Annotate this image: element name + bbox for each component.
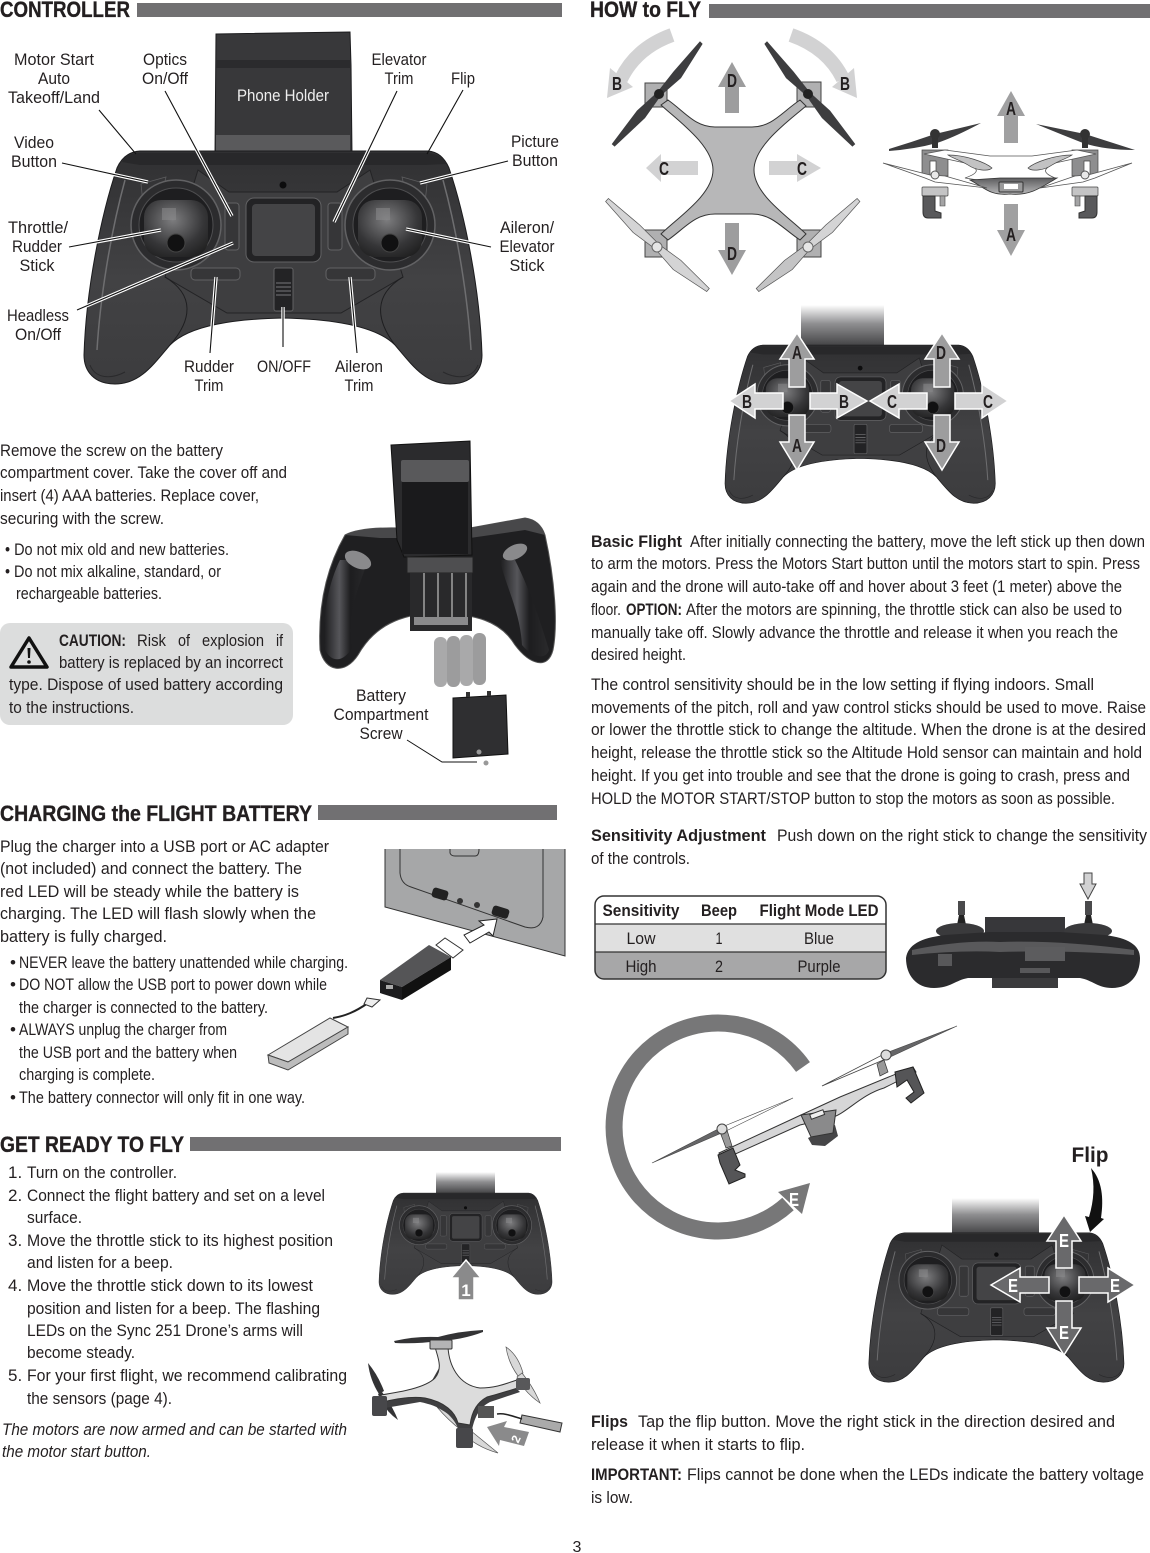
arrow: E right: E	[1110, 1276, 1120, 1296]
text: motors armed note: The motors are now armed and can be started with	[2, 1420, 347, 1439]
arrow: E left	[991, 1268, 1049, 1302]
arrow: A up: A	[1006, 99, 1016, 119]
text: battery instructions: securing with the screw.	[0, 509, 164, 528]
arrow: A down stick	[780, 415, 814, 470]
arrow: D up: D	[727, 71, 737, 91]
label: motor start: Auto	[38, 69, 70, 88]
illustration: controller step 1	[379, 1172, 552, 1300]
list: steps: 1.	[8, 1163, 22, 1182]
list: steps: For your first flight, we recommend calibrating	[27, 1366, 347, 1385]
list: steps: 4.	[8, 1276, 22, 1295]
list: battery warnings: • Do not mix alkaline, standard, or	[5, 562, 221, 581]
label: phone holder: Phone Holder	[237, 86, 329, 105]
heading bar: controller	[137, 3, 562, 17]
arrow: E up	[1047, 1215, 1081, 1268]
label: picture button	[511, 132, 559, 170]
text: charging instructions: Plug the charger into a USB port or AC adapter	[0, 837, 329, 856]
list: charging warnings	[10, 953, 348, 1107]
arrow: B left: B	[612, 74, 622, 94]
arrow: C left: C	[659, 159, 669, 179]
list: battery warnings: rechargeable batteries.	[16, 584, 162, 603]
list: steps: LEDs on the Sync 251 Drone’s arms will	[27, 1321, 303, 1340]
list: charging warnings: DO NOT allow the USB port to power down while	[19, 975, 327, 994]
text: flips: Tap the flip button. Move the right stick in the direction desired and	[638, 1412, 1115, 1431]
panel: how to fly	[590, 0, 1150, 1507]
text: control sensitivity: The control sensitivity should be in the low setting if flying indoors. Small	[591, 675, 1094, 694]
label: aileron trim: Aileron	[335, 357, 383, 376]
arrow: C right: C	[797, 159, 807, 179]
list: steps: 2.	[8, 1186, 22, 1205]
arrow: step 2	[487, 1421, 529, 1446]
illustration: controller with flip arrows	[869, 1144, 1135, 1382]
label: motor start	[8, 50, 100, 107]
text: charging instructions: battery is fully charged.	[0, 927, 167, 946]
label: battery compartment screw	[334, 686, 477, 762]
illustration: phone holder	[215, 32, 352, 167]
text: important: IMPORTANT:	[591, 1465, 682, 1484]
label: aileron trim: Trim	[344, 376, 374, 395]
table: sensitivity: Low	[626, 929, 656, 948]
label: optics: Optics	[143, 50, 187, 69]
callout: caution	[0, 623, 293, 725]
callout: caution: if	[276, 631, 283, 650]
label: battery compartment screw: Compartment	[334, 705, 429, 724]
list: steps: surface.	[27, 1208, 82, 1227]
arrow: E down: E	[1059, 1323, 1069, 1343]
table: sensitivity: 1	[716, 929, 722, 948]
label: video button: Video	[14, 133, 54, 152]
text: motors armed note	[2, 1420, 347, 1461]
arrow: C right stick	[955, 384, 1008, 418]
panel: charging section	[0, 801, 565, 1107]
table: sensitivity: Beep	[701, 901, 737, 920]
arrow: step 1	[451, 1260, 481, 1300]
list: steps	[8, 1163, 347, 1408]
text: battery instructions: Remove the screw on the battery	[0, 441, 223, 460]
label: rudder trim: Trim	[194, 376, 224, 395]
illustration: controller back with batteries	[320, 441, 555, 766]
leader lines	[62, 90, 508, 353]
callout: caution: CAUTION:	[59, 631, 126, 650]
heading: get ready: GET READY TO FLY	[0, 1132, 184, 1157]
text: charging instructions: (not included) and connect the battery. The	[0, 859, 302, 878]
list: charging warnings: •	[10, 975, 16, 994]
arrow: A up stick	[780, 333, 814, 387]
list: steps: position and listen for a beep. The flashing	[27, 1299, 320, 1318]
arrow: D up stick: D	[936, 343, 946, 363]
text: battery instructions: compartment cover. Take the cover off and	[0, 463, 287, 482]
arrow: E right	[1079, 1268, 1135, 1302]
text: sensitivity adjustment	[591, 826, 1147, 868]
list: steps: Move the throttle stick to its highest position	[27, 1231, 333, 1250]
arrow: A down: A	[1006, 225, 1016, 245]
list: charging warnings: charging is complete.	[19, 1065, 155, 1084]
arrow: flip button	[1085, 1168, 1104, 1232]
label: headless: On/Off	[15, 325, 61, 344]
illustration: controller side view	[906, 873, 1140, 988]
list: battery warnings	[5, 540, 229, 603]
arrow: E left: E	[1008, 1276, 1018, 1296]
text: important: is low.	[591, 1488, 633, 1507]
arrow: step 2: 2	[508, 1433, 524, 1445]
label: aileron elevator stick: Aileron/	[500, 218, 554, 237]
illustration: controller with stick arrows	[725, 305, 1008, 503]
label: aileron elevator stick: Stick	[510, 256, 545, 275]
illustration: flip circle arrow	[614, 1023, 810, 1231]
label: video button: Button	[11, 152, 57, 171]
text: battery instructions	[0, 441, 287, 528]
table: sensitivity: Sensitivity	[602, 901, 680, 920]
text: basic flight: floor.	[591, 600, 621, 619]
illustration: drone side view	[883, 91, 1135, 256]
arrow: C right	[769, 154, 821, 182]
label: battery compartment screw: Battery	[356, 686, 406, 705]
arrow: D down stick: D	[936, 436, 946, 456]
label: elevator trim: Elevator	[372, 50, 427, 69]
list: steps: 5.	[8, 1366, 22, 1385]
callout: caution: to the instructions.	[9, 698, 134, 717]
arrow: B right stick: B	[839, 392, 849, 412]
label: picture button: Button	[512, 151, 558, 170]
text: basic flight: Basic Flight	[591, 532, 682, 551]
arrow: step 1: 1	[461, 1281, 471, 1300]
text: charging instructions: red LED will be steady while the battery is	[0, 882, 299, 901]
text: flips: Flips	[591, 1412, 628, 1431]
list: charging warnings: ALWAYS unplug the charger from	[19, 1020, 227, 1039]
list: charging warnings: •	[10, 953, 16, 972]
list: steps: become steady.	[27, 1343, 135, 1362]
arrow: plug direction	[464, 919, 497, 943]
panel: get ready to fly	[0, 1132, 562, 1461]
callout: caution: battery is replaced by an incorrect	[59, 653, 283, 672]
text: sensitivity adjustment: Sensitivity Adjustment	[591, 826, 766, 845]
arrow: C right stick: C	[983, 392, 993, 412]
table: sensitivity: Flight Mode LED	[760, 901, 878, 920]
label: optics	[142, 50, 188, 88]
callout: caution: explosion	[202, 631, 264, 650]
list: charging warnings: •	[10, 1088, 16, 1107]
illustration: usb charger and battery	[268, 849, 565, 1070]
label: rudder trim	[184, 357, 234, 395]
table: sensitivity	[595, 896, 886, 979]
illustration: tilted drone	[652, 1026, 957, 1184]
arrow: B left stick	[729, 384, 783, 418]
arrow: D up stick	[925, 333, 959, 387]
text: basic flight: OPTION:	[626, 600, 682, 619]
label: throttle rudder stick: Stick	[20, 256, 55, 275]
label: motor start: Takeoff/Land	[8, 88, 100, 107]
text: control sensitivity	[591, 675, 1146, 808]
arrow: B right stick	[810, 384, 867, 418]
table: sensitivity: Purple	[798, 957, 840, 976]
text: important	[591, 1465, 1144, 1507]
arrow: C left	[646, 154, 698, 182]
text: motors armed note: the motor start button.	[2, 1442, 151, 1461]
list: steps: Connect the flight battery and set on a level	[27, 1186, 325, 1205]
label: motor start: Motor Start	[14, 50, 94, 69]
arrow: B right	[791, 35, 857, 98]
arrow: E up: E	[1059, 1231, 1069, 1251]
callout: caution: type. Dispose of used battery according	[9, 675, 283, 694]
arrow: D down: D	[727, 244, 737, 264]
arrow: B right: B	[840, 74, 850, 94]
callout: caution: of	[178, 631, 190, 650]
arrow: A up	[997, 91, 1025, 143]
list: charging warnings: •	[10, 1020, 16, 1039]
icon: warning triangle	[11, 638, 47, 667]
list: charging warnings: the USB port and the battery when	[19, 1043, 237, 1062]
label: aileron elevator stick: Elevator	[500, 237, 555, 256]
label: flip: Flip	[451, 69, 475, 88]
illustration: controller front	[84, 151, 482, 384]
list: steps: Move the throttle stick down to its lowest	[27, 1276, 313, 1295]
label: picture button: Picture	[511, 132, 559, 151]
text: flips	[591, 1412, 1115, 1454]
list: steps: the sensors (page 4).	[27, 1389, 172, 1408]
label: aileron trim	[335, 357, 383, 395]
label: battery compartment screw: Screw	[360, 724, 403, 743]
arrow: A down	[997, 204, 1025, 256]
label: video button	[11, 133, 57, 171]
list: battery warnings: • Do not mix old and new batteries.	[5, 540, 229, 559]
arrow: push down stick	[1080, 873, 1096, 899]
table: sensitivity: Blue	[804, 929, 834, 948]
table: sensitivity: High	[626, 957, 656, 976]
label: throttle rudder stick	[8, 218, 68, 275]
label: headless: Headless	[7, 306, 69, 325]
list: steps: 3.	[8, 1231, 22, 1250]
arrow: C left stick: C	[887, 392, 897, 412]
label: flip: Flip	[1072, 1144, 1108, 1167]
label: headless	[7, 306, 69, 344]
arrow: A up stick: A	[792, 343, 802, 363]
heading bar: how to fly	[709, 4, 1150, 18]
label: aileron elevator stick	[500, 218, 555, 275]
label: optics: On/Off	[142, 69, 188, 88]
list: steps: and listen for a beep.	[27, 1253, 173, 1272]
text: basic flight: desired height.	[591, 645, 686, 664]
arrow: D down	[718, 223, 746, 275]
text: basic flight	[591, 532, 1145, 664]
list: charging warnings: NEVER leave the battery unattended while charging.	[19, 953, 348, 972]
label: throttle rudder stick: Rudder	[12, 237, 62, 256]
panel: controller section	[0, 0, 562, 766]
list: charging warnings: The battery connector will only fit in one way.	[19, 1088, 305, 1107]
label: rudder trim: Rudder	[184, 357, 234, 376]
text: sensitivity adjustment: of the controls.	[591, 849, 690, 868]
text: charging instructions: charging. The LED will flash slowly when the	[0, 904, 316, 923]
text: charging instructions	[0, 837, 329, 946]
text: battery instructions: insert (4) AAA batteries. Replace cover,	[0, 486, 259, 505]
illustration: flip circle arrow: E	[789, 1190, 799, 1210]
arrow: A down stick: A	[792, 436, 802, 456]
label: elevator trim: Trim	[384, 69, 414, 88]
arrow: B left	[607, 35, 672, 98]
label: elevator trim	[372, 50, 427, 88]
arrow: C left stick	[870, 384, 927, 418]
illustration: drone top view	[606, 35, 860, 292]
table: sensitivity: 2	[715, 957, 723, 976]
heading bar: get ready	[190, 1137, 561, 1151]
heading bar: charging	[318, 805, 557, 820]
arrow: E down	[1047, 1301, 1081, 1355]
illustration: drone step 2	[368, 1330, 562, 1453]
label: on off: ON/OFF	[257, 357, 311, 376]
label: throttle rudder stick: Throttle/	[8, 218, 68, 237]
list: charging warnings: the charger is connected to the battery.	[19, 998, 268, 1017]
text: flips: release it when it starts to flip.	[591, 1435, 805, 1454]
list: steps: Turn on the controller.	[27, 1163, 177, 1182]
arrow: D up	[718, 62, 746, 113]
arrow: D down stick	[925, 415, 959, 470]
callout: caution: Risk	[137, 631, 166, 650]
arrow: B left stick: B	[742, 392, 752, 412]
heading: charging: CHARGING the FLIGHT BATTERY	[0, 801, 312, 826]
